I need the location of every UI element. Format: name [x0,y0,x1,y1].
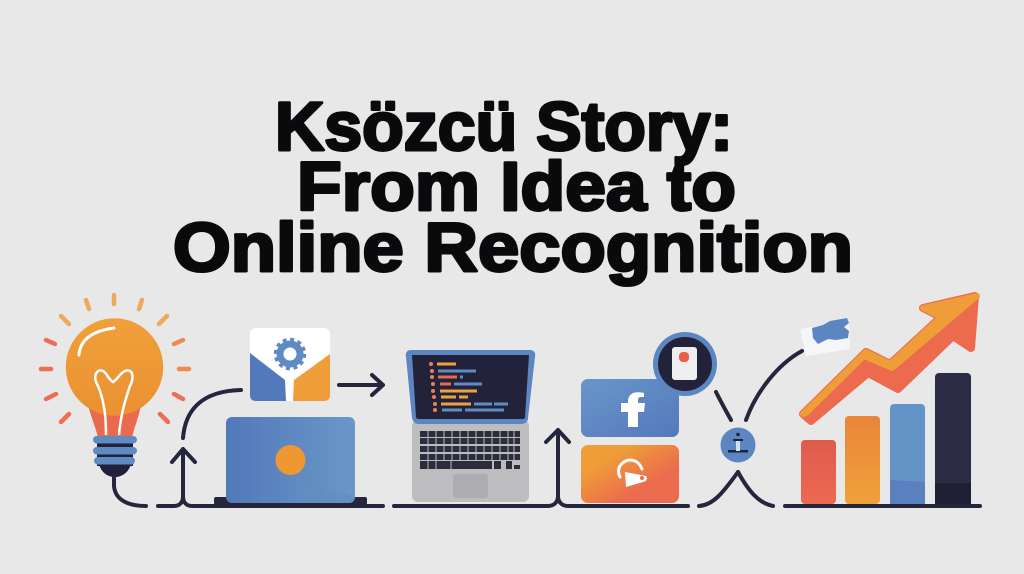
icon: light bulb [41,295,189,477]
trackpad [453,474,488,498]
highlight [79,328,114,355]
icon: tag card [800,318,850,356]
filament [95,370,132,435]
keyboard [420,431,520,469]
title: From Idea to [297,148,736,225]
icon: gear card [250,328,330,401]
title: Ksözcü Story: [275,88,733,165]
icon: small network node [720,428,756,462]
icon: blue laptop [214,417,367,505]
icon: video card [581,445,679,503]
bulb rays [41,295,189,422]
screen [406,350,535,424]
baseline connector [114,351,980,506]
icon: app badge [653,332,717,396]
title [173,88,853,286]
icon: code laptop [406,350,535,502]
keyboard base [412,420,529,502]
icon: growth arrow [803,296,977,421]
bulb neck [88,405,141,438]
title: Online Recognition [173,209,853,286]
code lines [437,364,508,410]
bulb screw base [99,464,131,477]
bulb glass [66,318,163,416]
icon: facebook card [581,379,679,437]
chart: growth bars [801,373,971,504]
gear [280,344,300,364]
